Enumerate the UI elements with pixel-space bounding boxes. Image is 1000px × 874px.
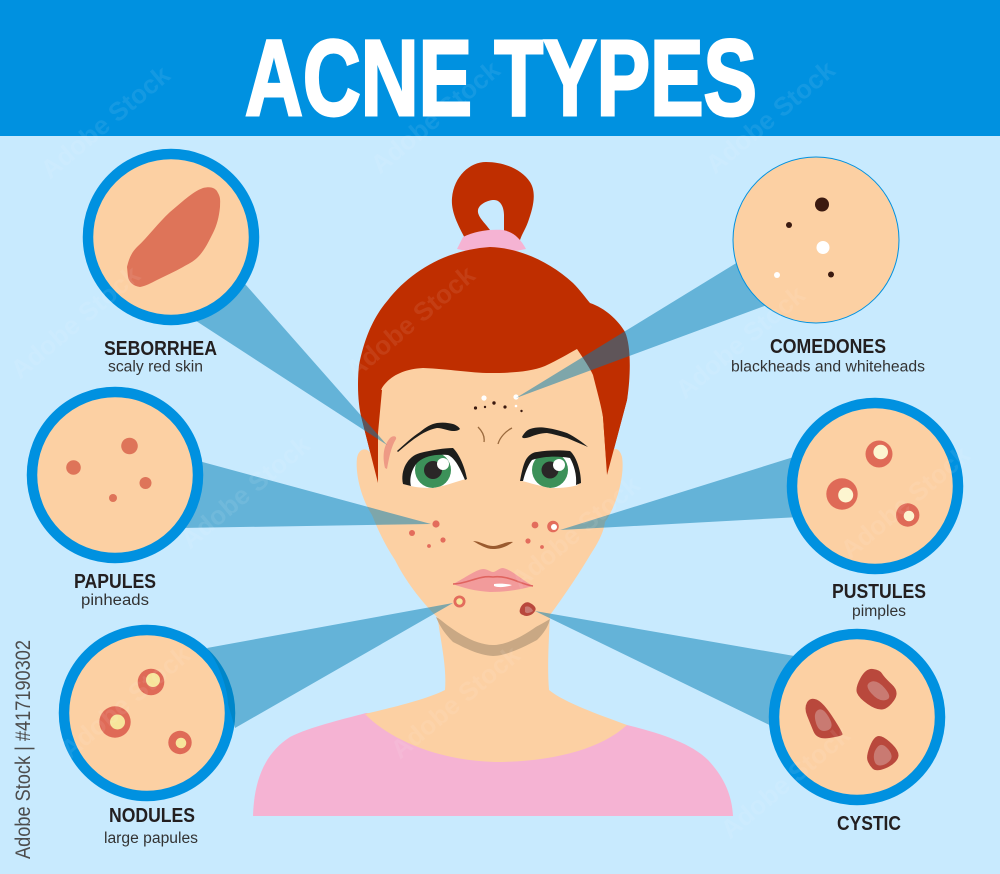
watermark: Adobe Stock [670, 279, 811, 405]
watermark: Adobe Stock [5, 259, 146, 385]
body shirt [253, 713, 733, 816]
panel: cystic [774, 634, 940, 835]
panel: seborrhea [88, 154, 254, 376]
watermark: Adobe Stock [35, 59, 176, 185]
right eyebrow [522, 427, 588, 447]
icon: comedone spots [774, 198, 834, 278]
neck shadow [436, 617, 550, 656]
watermark: Adobe Stock [55, 639, 196, 765]
right eye [520, 450, 581, 488]
watermark: Adobe Stock [365, 54, 506, 180]
circle [792, 403, 958, 569]
watermark: Adobe Stock [340, 259, 481, 385]
header banner [0, 0, 1000, 136]
left eye [402, 448, 467, 488]
icon: cyst 3 [867, 736, 899, 770]
beam: comedones [516, 262, 775, 398]
circle [88, 154, 254, 320]
watermark: Adobe Stock [715, 719, 856, 845]
face [357, 349, 623, 645]
sublabel: pinheads [81, 592, 149, 609]
label: NODULES [109, 804, 195, 827]
label: PAPULES [74, 570, 156, 593]
icon: nodule spots [99, 669, 192, 754]
sublabel: blackheads and whiteheads [731, 358, 925, 376]
icon: papule spots [66, 438, 152, 502]
panel: papules [32, 392, 198, 609]
circle [733, 157, 899, 323]
icon: red patch [127, 187, 220, 287]
circle [32, 392, 198, 558]
beam: nodules [207, 603, 453, 728]
neck [365, 612, 627, 762]
watermark: Adobe Stock [385, 639, 526, 765]
watermark: Adobe Stock [505, 469, 646, 595]
nose [473, 541, 513, 549]
seborrhea patch on face [384, 436, 396, 469]
beam: papules [180, 460, 431, 528]
stock id side text: Adobe Stock | #417190302 [12, 640, 35, 859]
label: COMEDONES [770, 335, 886, 358]
hair sideburn left [359, 390, 382, 483]
title: ACNE TYPES [245, 17, 757, 138]
label: PUSTULES [832, 580, 926, 603]
watermark: Adobe Stock [175, 429, 316, 555]
cheek papules right [525, 522, 544, 549]
panel: comedones [731, 157, 925, 376]
figure: woman [253, 162, 733, 816]
sublabel: large papules [104, 830, 198, 847]
hair band [457, 230, 526, 256]
sublabel: scaly red skin [108, 358, 203, 376]
left eyebrow [397, 423, 460, 452]
sublabel: pimples [852, 603, 906, 620]
pustule on cheek [547, 521, 559, 532]
hair bun [452, 162, 534, 240]
panel: pustules [792, 403, 958, 620]
circle [774, 634, 940, 800]
beam: seborrhea [190, 276, 387, 445]
cyst on chin [520, 602, 536, 616]
forehead creases [478, 427, 512, 444]
circle [64, 630, 230, 796]
panel: nodules [64, 630, 230, 847]
icon: cyst 2 [856, 669, 897, 710]
watermark: Adobe Stock [700, 54, 841, 180]
lips [453, 568, 533, 592]
label: CYSTIC [837, 812, 901, 835]
forehead blemishes [474, 394, 523, 412]
label: SEBORRHEA [104, 337, 217, 360]
hair back [358, 247, 630, 483]
nodule on chin [454, 596, 466, 608]
cheek papules left [409, 520, 446, 548]
hair sideburn right [600, 390, 628, 475]
icon: pustule spots [826, 440, 919, 527]
icon: cyst 1 [806, 699, 843, 738]
watermark: Adobe Stock [835, 439, 976, 565]
beam: cystic [535, 611, 800, 735]
beam: pustules [560, 455, 800, 530]
